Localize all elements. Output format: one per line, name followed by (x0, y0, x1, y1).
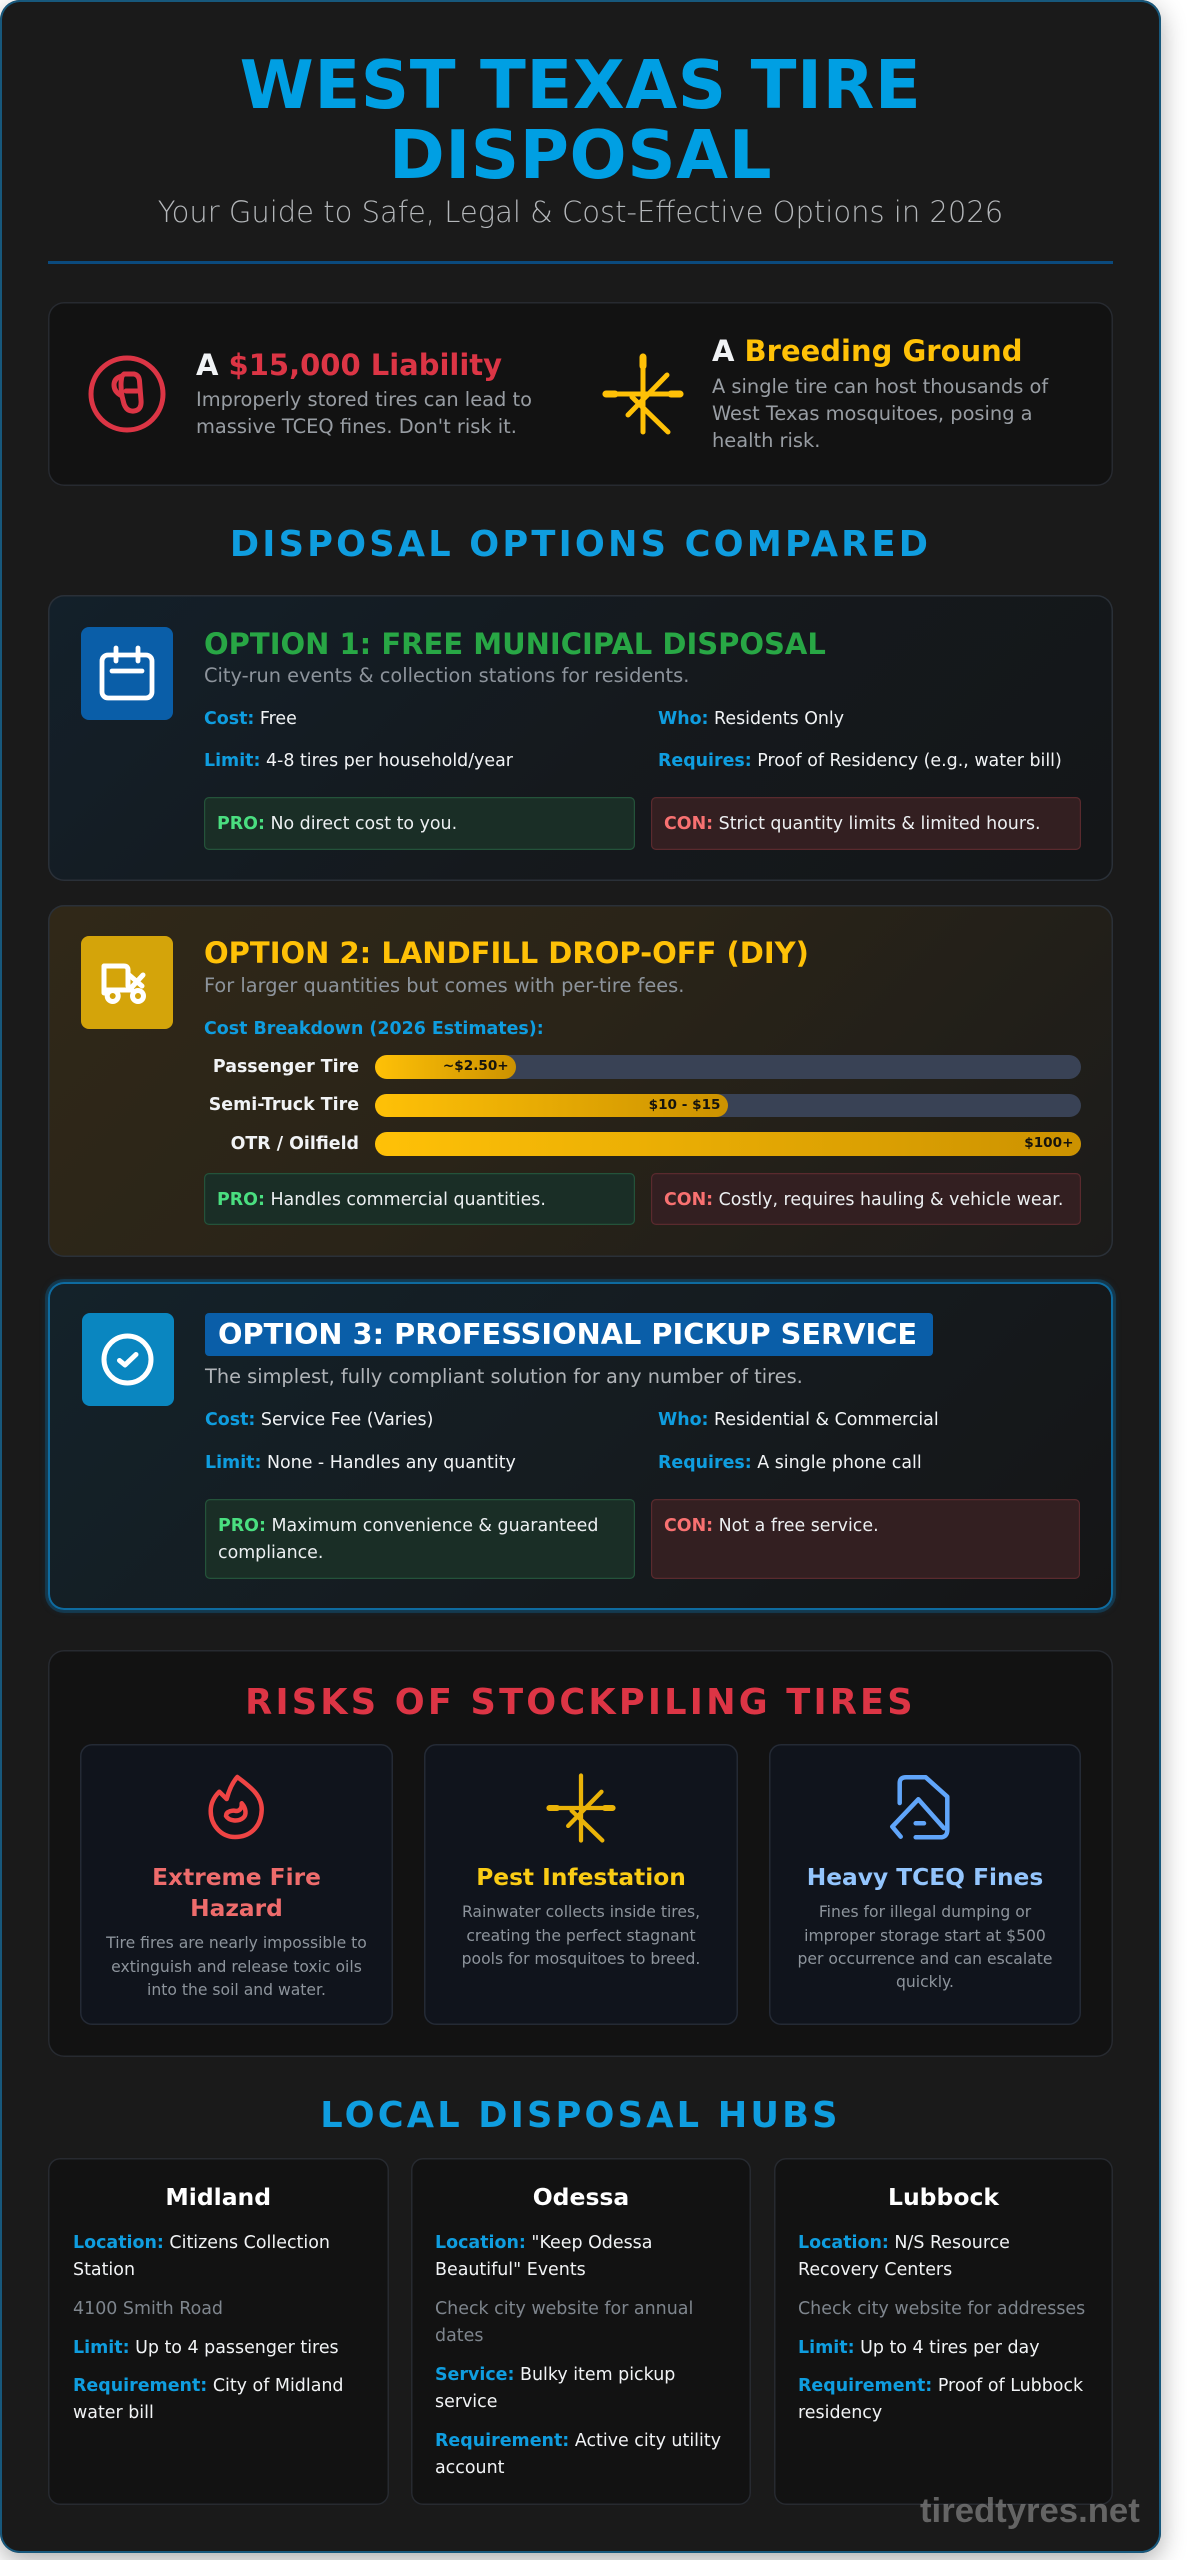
alert text: liability (196, 388, 532, 438)
hub requirement: Requirement: City of Midland (73, 2376, 344, 2396)
alert text: breeding ground: A single tire can host thousands of (712, 375, 1048, 398)
pro box: PRO: Maximum convenience & guaranteed (218, 1516, 598, 1536)
pro box (205, 1499, 635, 1579)
subtitle: Your Guide to Safe, Legal & Cost-Effective Options in 2026 (158, 194, 1003, 228)
hub requirement: Requirement: Active city utility (435, 2431, 721, 2451)
risk description: pools for mosquitoes to breed. (462, 1950, 700, 1968)
bar: OTR tire (375, 1132, 1081, 1156)
detail: who: Who: Residents Only (658, 709, 844, 729)
con box (651, 1173, 1081, 1225)
icon: flame (208, 1774, 264, 1840)
hub requirement (73, 2376, 344, 2423)
risk description: improper storage start at $500 (804, 1927, 1046, 1945)
title (240, 46, 921, 194)
icon: mosquito (546, 1773, 616, 1843)
risk title: Extreme Fire (152, 1864, 321, 1891)
risk title: Pest Infestation (476, 1864, 686, 1891)
panel: option 3 (48, 1282, 1113, 1610)
hub location: Beautiful" Events (435, 2260, 586, 2280)
risk description (462, 1903, 700, 1968)
bar: passenger tire (375, 1055, 1081, 1078)
section heading: options: DISPOSAL OPTIONS COMPARED (230, 524, 931, 565)
alert heading: breeding ground: A Breeding Ground (712, 334, 1023, 368)
risk description: into the soil and water. (147, 1981, 326, 1999)
hub location: Location: N/S Resource (798, 2233, 1010, 2253)
alert text: breeding ground: West Texas mosquitoes, posing a (712, 402, 1033, 425)
icon: document (890, 1775, 950, 1840)
alert text: liability: Improperly stored tires can lead to (196, 388, 532, 411)
hub limit: Limit: Up to 4 tires per day (798, 2338, 1040, 2358)
risk title: Heavy TCEQ Fines (807, 1864, 1043, 1891)
section heading: risks: RISKS OF STOCKPILING TIRES (245, 1682, 916, 1723)
hub requirement: residency (798, 2403, 882, 2423)
alert text: liability: massive TCEQ fines. Don't risk it. (196, 415, 517, 438)
alert text: breeding ground: health risk. (712, 429, 820, 452)
hub name: Odessa (533, 2183, 629, 2211)
detail: cost: Cost: Service Fee (Varies) (205, 1410, 433, 1430)
title: DISPOSAL (389, 116, 772, 194)
hub note: Check city website for addresses (798, 2299, 1085, 2319)
detail: limit: Limit: 4-8 tires per household/year (204, 751, 513, 771)
bar: semi-truck tire: $10 - $15 (649, 1096, 720, 1112)
risk description: Fines for illegal dumping or (819, 1903, 1031, 1921)
bar label: semi-truck: Semi-Truck Tire (209, 1095, 359, 1115)
risk description: creating the perfect stagnant (466, 1927, 696, 1945)
hub location: Station (73, 2260, 135, 2280)
hub requirement (435, 2431, 721, 2478)
hub requirement (798, 2376, 1083, 2423)
bar: passenger tire: ~$2.50+ (443, 1058, 509, 1074)
risk card: pests (424, 1744, 738, 2025)
con box: CON: Not a free service. (664, 1516, 879, 1536)
title: WEST TEXAS TIRE (240, 46, 921, 124)
hub location: Location: Citizens Collection (73, 2233, 330, 2253)
icon: truck (81, 936, 173, 1029)
option title: OPTION 1: FREE MUNICIPAL DISPOSAL (204, 626, 826, 660)
hub card: Midland (48, 2158, 388, 2505)
hub name: Midland (165, 2183, 271, 2211)
risk description: Rainwater collects inside tires, (462, 1903, 700, 1921)
detail: limit: Limit: None - Handles any quantity (205, 1453, 516, 1473)
hub location: Recovery Centers (798, 2260, 952, 2280)
risk description (798, 1903, 1052, 1991)
hub name: Lubbock (888, 2183, 999, 2211)
bar label: OTR: OTR / Oilfield (231, 1134, 359, 1154)
icon: calendar (81, 627, 173, 720)
bar label: passenger: Passenger Tire (213, 1057, 359, 1077)
risk description: extinguish and release toxic oils (111, 1958, 362, 1976)
risk title: Hazard (190, 1895, 283, 1922)
pro box (204, 797, 635, 850)
hub requirement: account (435, 2458, 504, 2478)
detail: who: Who: Residential & Commercial (658, 1410, 939, 1430)
risk description: Tire fires are nearly impossible to (106, 1934, 367, 1952)
con box (651, 1499, 1080, 1579)
alert text: breeding ground (712, 375, 1049, 452)
con box: CON: Strict quantity limits & limited hours. (664, 814, 1041, 834)
detail: requires: Requires: A single phone call (658, 1453, 922, 1473)
hub service: Service: Bulky item pickup (435, 2365, 675, 2385)
option description: The simplest, fully compliant solution for any number of tires. (205, 1365, 803, 1388)
risk description: quickly. (896, 1973, 954, 1991)
watermark: tiredtyres.net (920, 2492, 1140, 2530)
con box (651, 797, 1081, 850)
icon: liability (88, 356, 166, 432)
section heading: hubs: LOCAL DISPOSAL HUBS (320, 2095, 841, 2136)
icon: mosquito (602, 354, 684, 434)
option title: OPTION 2: LANDFILL DROP-OFF (DIY) (204, 936, 809, 970)
hub location: Location: "Keep Odessa (435, 2233, 652, 2253)
panel: option 2 (48, 905, 1113, 1257)
hub location (798, 2233, 1010, 2280)
option description: City-run events & collection stations for residents. (204, 664, 689, 687)
hub note (435, 2299, 693, 2346)
bar: semi-truck tire (375, 1094, 1081, 1117)
pro box: compliance. (218, 1543, 323, 1563)
hub note: dates (435, 2326, 483, 2346)
hub requirement: Requirement: Proof of Lubbock (798, 2376, 1083, 2396)
hub service: service (435, 2392, 497, 2412)
hub card: Lubbock (774, 2158, 1113, 2505)
detail: requires: Requires: Proof of Residency (e.g., water bill) (658, 751, 1062, 771)
risk card: fines (769, 1744, 1081, 2025)
cost breakdown heading: Cost Breakdown (2026 Estimates): (204, 1019, 544, 1039)
risk description (106, 1934, 367, 1999)
hub service (435, 2365, 675, 2412)
pro box: PRO: No direct cost to you. (217, 814, 457, 834)
pro box: PRO: Handles commercial quantities. (217, 1190, 546, 1210)
panel: risks (48, 1650, 1113, 2057)
hub limit: Limit: Up to 4 passenger tires (73, 2338, 339, 2358)
option description: For larger quantities but comes with per-tire fees. (204, 974, 684, 997)
hub location (73, 2233, 330, 2280)
icon: check (82, 1313, 174, 1406)
detail: cost: Cost: Free (204, 709, 297, 729)
risk description: per occurrence and can escalate (798, 1950, 1052, 1968)
hub requirement: water bill (73, 2403, 154, 2423)
panel: alerts (48, 302, 1113, 486)
bar: OTR tire: $100+ (1024, 1135, 1074, 1151)
risk title (152, 1864, 321, 1922)
pro box (204, 1173, 635, 1225)
con box: CON: Costly, requires hauling & vehicle wear. (664, 1190, 1063, 1210)
hub location (435, 2233, 652, 2280)
hub address: 4100 Smith Road (73, 2299, 223, 2319)
risk card: fire (80, 1744, 393, 2025)
option title highlighted: OPTION 3: PROFESSIONAL PICKUP SERVICE (218, 1317, 917, 1351)
panel: option 1 (48, 595, 1113, 881)
alert heading: liability: A $15,000 Liability (196, 348, 502, 382)
hub note: Check city website for annual (435, 2299, 693, 2319)
hub card: Odessa (411, 2158, 751, 2505)
